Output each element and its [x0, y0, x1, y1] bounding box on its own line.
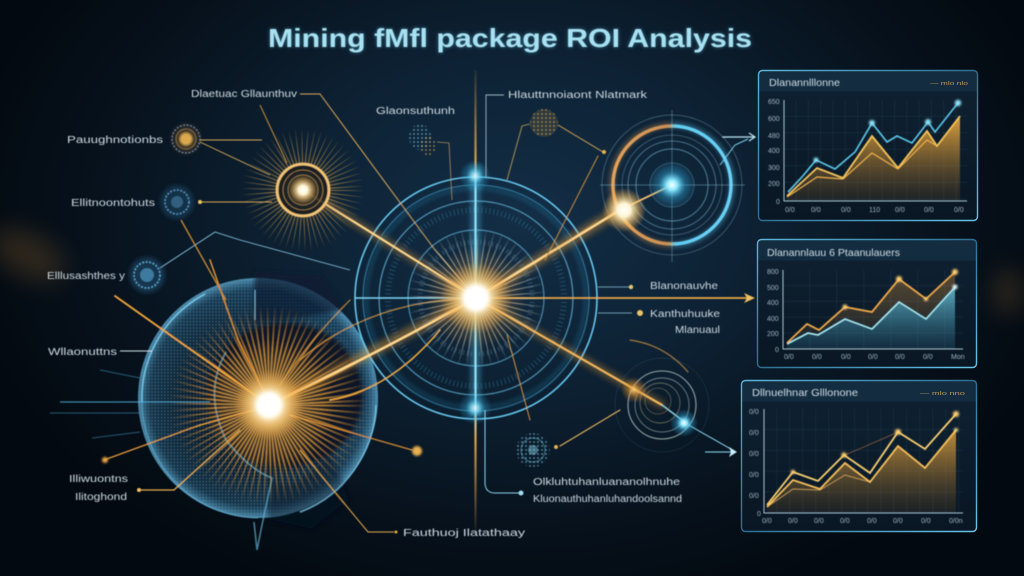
label: bottom right first line: Olkluhtuhanluananolhnuhe	[533, 477, 681, 488]
chart 2 axis labels: 0	[775, 347, 779, 354]
chart 3 axis labels: 0	[757, 511, 761, 518]
burst: left globe star	[203, 339, 335, 471]
chart 3 axis labels	[749, 409, 963, 525]
chart 3 axis labels: 0/0	[749, 409, 759, 416]
label: right first: Blanonauvhe	[650, 281, 719, 292]
node: upper centre orb	[409, 124, 436, 156]
label: bottom right second line: Kluonauthuhanluhandoolsannd	[533, 494, 682, 505]
label: top right: Hlauttnnoiaont Nlatmark	[508, 90, 648, 101]
label: left second: Ellitnoontohuts	[71, 198, 155, 209]
chart 3 axis labels: 0/0	[867, 518, 877, 525]
arrow: horizontal to chart 2	[744, 293, 755, 303]
chart 3 axis labels: 0/0	[893, 518, 903, 525]
arrow: to chart 3	[729, 447, 737, 457]
chart 2 axis labels: 0/0	[895, 354, 905, 361]
rings: central radar circle	[355, 177, 597, 419]
thin leader lines	[120, 94, 748, 534]
label: left fifth: Illiwuontns	[69, 474, 128, 485]
chart 3 heading: Dllnuelhnar Glllonone	[752, 387, 858, 399]
node: lower cyan dotted orb	[516, 433, 550, 467]
chart 2 axis labels: Mon	[951, 354, 965, 361]
chart 2 axis labels: 0/0	[868, 354, 878, 361]
chart 2 heading: Dlanannlauu 6 Ptaanulauers	[767, 247, 900, 259]
chart 1 axis labels: 0/0	[895, 207, 905, 214]
node: lower-left blue orb	[129, 257, 165, 293]
chart 2 axis labels: 400	[767, 316, 779, 323]
chart 2 axis labels: 200	[767, 331, 779, 338]
chart 3 axis labels: 0/0	[921, 518, 931, 525]
chart 1 axis labels: 600	[768, 116, 780, 123]
chart 2 axis labels: 0/0	[784, 354, 794, 361]
label: top centre: Glaonsuthunh	[376, 106, 455, 117]
panel: chart 3	[741, 380, 977, 532]
chart 3 axis labels: 0/0	[762, 518, 772, 525]
chart 2 axis labels: 0/0	[923, 354, 933, 361]
beams: golden connecting beams	[104, 156, 688, 460]
chart 2 axis labels: 500	[767, 285, 779, 292]
chart 1 axis labels	[768, 99, 964, 214]
title: Mining fMfl package ROI Analysis	[268, 23, 752, 53]
chart 1 axis labels: 0/0	[785, 207, 795, 214]
chart 2 axis labels: 0/0	[812, 354, 822, 361]
chart 1 axis labels: 480	[768, 133, 780, 140]
chart 1 axis labels: 0	[776, 199, 780, 206]
label: top left: Dlaetuac Gllaunthuv	[191, 89, 297, 100]
node: upper gold dotted orb	[530, 109, 606, 154]
chart 3 axis labels: 0/0	[749, 472, 759, 479]
label: right second: Kanthuhuuke	[650, 309, 721, 320]
chart 1 axis labels: 0/0	[924, 207, 934, 214]
chart 1 legend: — mlo nlo	[930, 81, 968, 87]
label: left fourth: Wllaonuttns	[48, 347, 117, 358]
chart 1 axis labels: 0/0	[954, 207, 964, 214]
label: left top: Pauughnotionbs	[67, 135, 163, 146]
node: lower-right ring target	[615, 358, 709, 452]
text labels	[47, 89, 721, 539]
chart 2 axis labels: 800	[767, 269, 779, 276]
chart 1 axis labels: 300	[768, 165, 780, 172]
arrow: to chart 1	[722, 133, 755, 141]
chart 3 axis labels: 0/0	[814, 518, 824, 525]
chart 3 axis labels: 0/0	[749, 430, 759, 437]
chart 1 axis labels: 110	[869, 207, 880, 214]
node: left blue orb	[160, 185, 194, 219]
chart 1 axis labels: 0/0	[811, 207, 821, 214]
panel: chart 1	[758, 70, 978, 221]
chart 2 plot	[783, 269, 963, 349]
label: left fifth second line: Ilitoghond	[75, 492, 127, 503]
chart 3 axis labels: 0/0n	[949, 518, 963, 525]
chart 1 axis labels: 200	[768, 181, 780, 188]
axis lines through centre	[355, 70, 748, 530]
title: Mining fMfl package ROI Analysis	[268, 23, 752, 53]
chart 1 heading: Dlanannlllonne	[769, 77, 840, 89]
chart 3 plot	[764, 409, 963, 513]
chart 1 axis labels: 400	[768, 148, 780, 155]
chart 3 legend: — mlo nno	[920, 391, 965, 397]
label: bottom centre: Fauthuoj Ilatathaay	[403, 528, 525, 539]
chart 1 plot	[784, 100, 967, 201]
chart 3 axis labels: 0/0	[840, 518, 850, 525]
chart 3 axis labels: 0/0	[749, 451, 759, 458]
chart 3 axis labels: 0/0	[749, 493, 759, 500]
node: left gold orb	[168, 121, 204, 157]
node: upper-left sun ring	[257, 144, 349, 236]
chart 1 axis labels: 650	[768, 99, 780, 106]
scene: main diagram	[50, 70, 755, 550]
chart 2 axis labels: 400	[767, 300, 779, 307]
label: left third: Elllusashthes y	[47, 271, 125, 282]
node: upper-right ring target	[600, 110, 745, 262]
node: small sparks	[102, 285, 643, 496]
label: right second line: Mlanuaul	[675, 325, 720, 336]
burst: central star	[426, 248, 526, 348]
chart 2 axis labels	[767, 269, 965, 361]
chart 2 axis labels: 0/0	[841, 354, 851, 361]
globe: dotted blue sphere	[50, 272, 378, 550]
chart 3 axis labels: 0/0	[788, 518, 798, 525]
chart 1 axis labels: 0/0	[841, 207, 851, 214]
panel: chart 2	[757, 239, 977, 368]
